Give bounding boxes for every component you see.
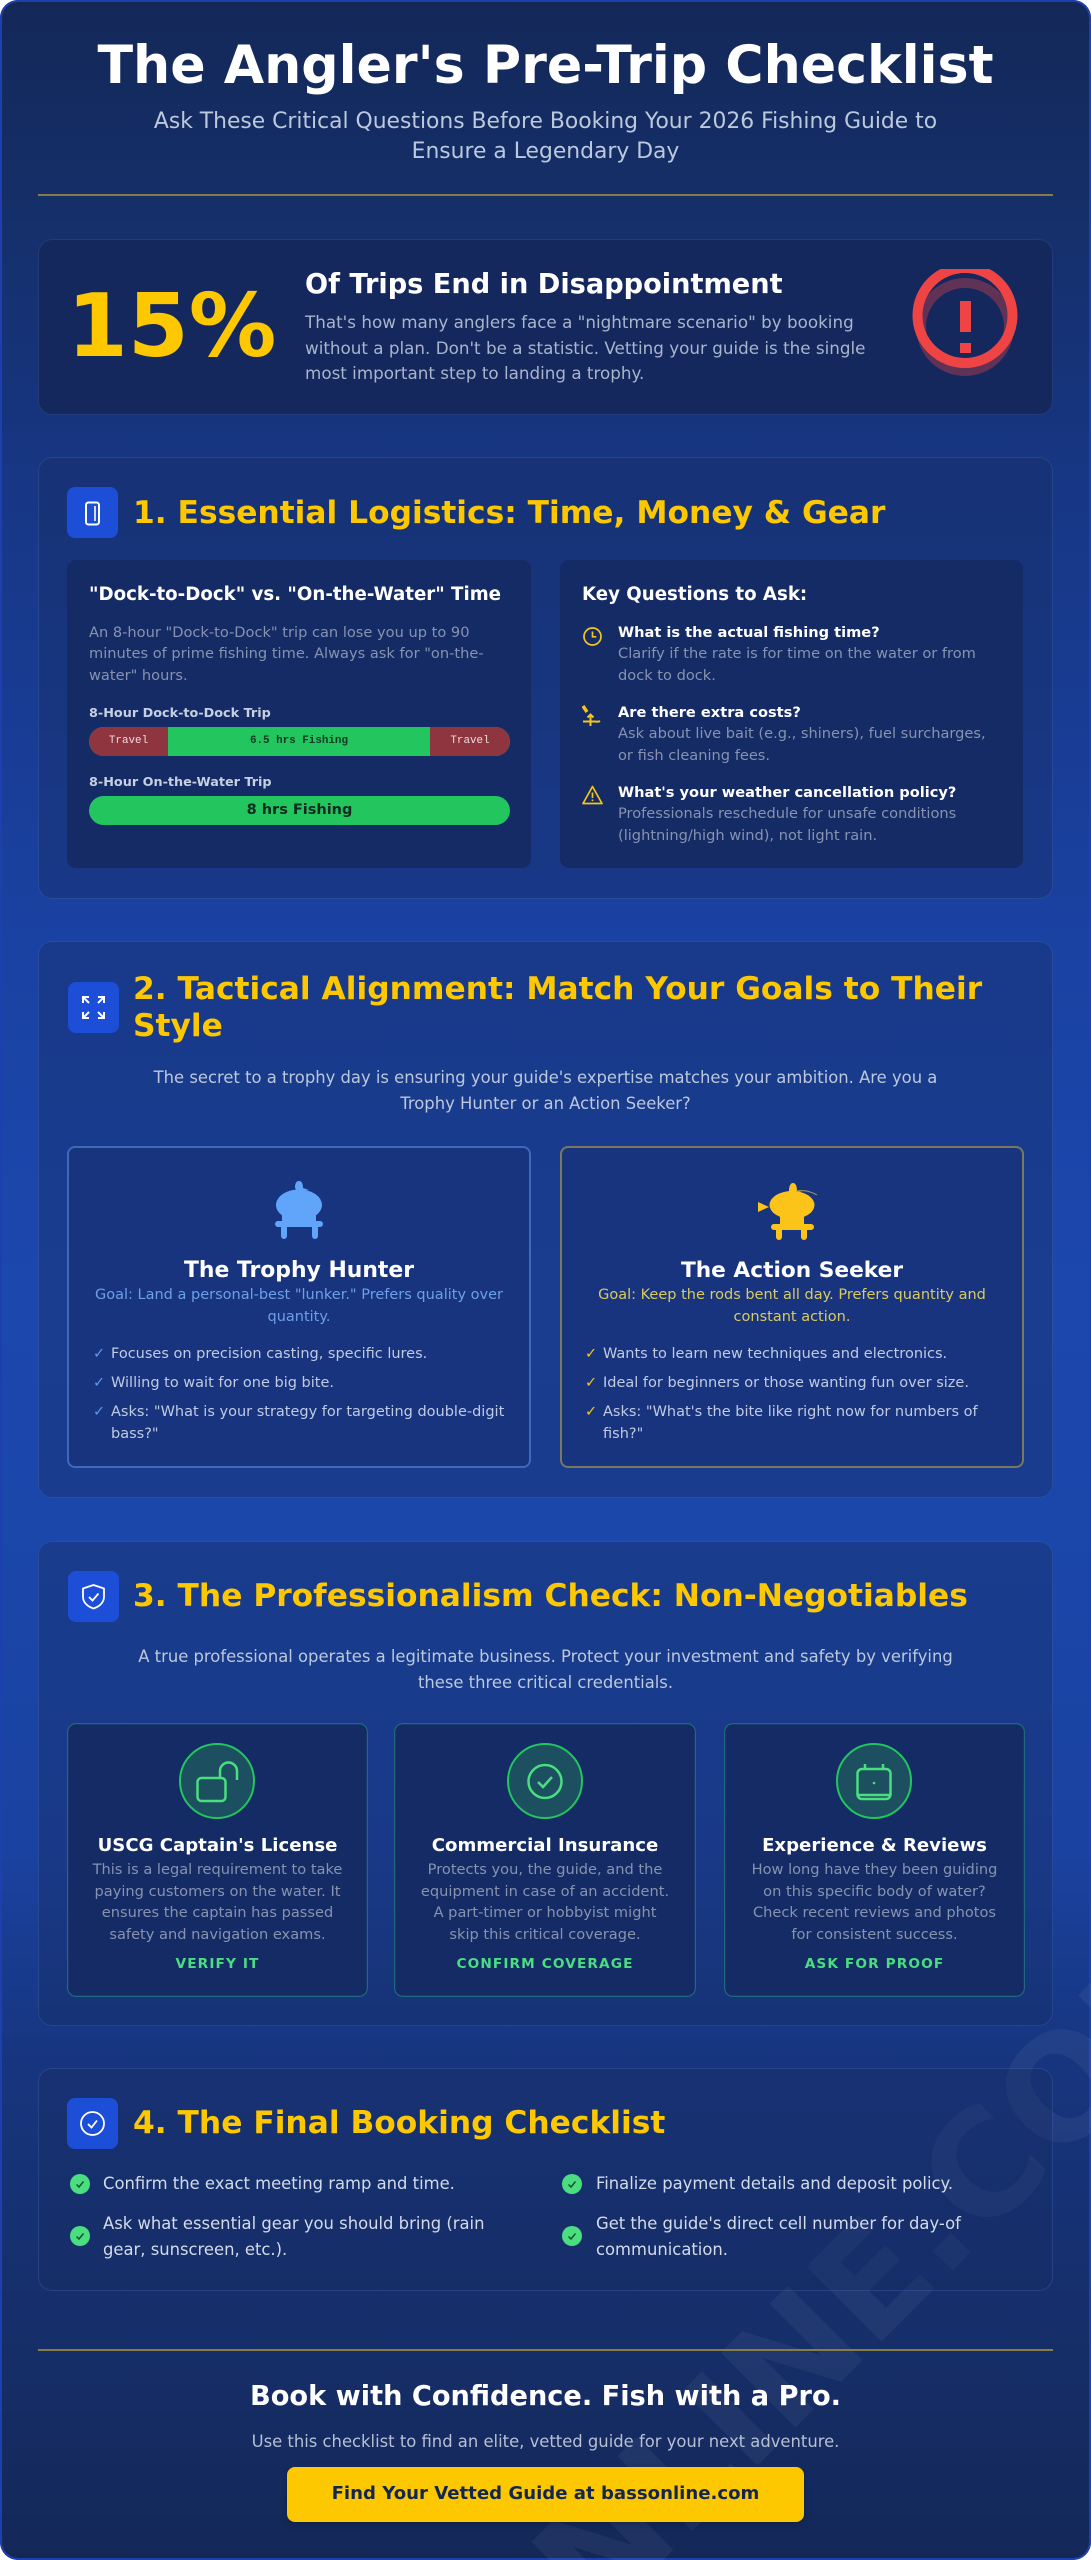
card: action seeker bbox=[560, 1146, 1024, 1468]
title: The Angler's Pre-Trip Checklist bbox=[97, 36, 994, 96]
card text: equipment in case of an accident. bbox=[421, 1883, 669, 1900]
icon: alert circle bbox=[912, 269, 1018, 376]
card text bbox=[421, 1861, 669, 1943]
checklist: ✓ bbox=[93, 1346, 105, 1362]
goal text bbox=[95, 1287, 503, 1325]
checklist bbox=[585, 1346, 978, 1442]
section heading: 3. The Professionalism Check: Non-Negotiables bbox=[133, 1578, 968, 1614]
bar: on-the-water bbox=[89, 796, 510, 825]
card text: safety and navigation exams. bbox=[109, 1926, 326, 1943]
card text bbox=[92, 1861, 342, 1943]
bar: dock-to-dock bbox=[89, 727, 510, 756]
icon: shield check bbox=[68, 1571, 119, 1622]
checklist bbox=[93, 1346, 504, 1442]
checklist: ✓ bbox=[585, 1404, 597, 1420]
checklist: ✓ bbox=[93, 1375, 105, 1391]
checklist item: Finalize payment details and deposit policy. bbox=[596, 2174, 953, 2193]
footer divider bbox=[38, 2349, 1053, 2351]
question 2: Are there extra costs? bbox=[618, 704, 801, 720]
checklist: Focuses on precision casting, specific lures. bbox=[111, 1346, 427, 1362]
goal text: quantity. bbox=[268, 1309, 330, 1325]
card text: Protects you, the guide, and the bbox=[428, 1861, 662, 1878]
checklist item: Confirm the exact meeting ramp and time. bbox=[103, 2174, 455, 2193]
icon: action fish bbox=[758, 1183, 818, 1240]
checklist: Willing to wait for one big bite. bbox=[111, 1375, 334, 1391]
stat description: That's how many anglers face a "nightmare scenario" by booking bbox=[305, 312, 854, 332]
checklist: Asks: "What's the bite like right now for numbers of bbox=[603, 1404, 978, 1420]
icon: warning triangle bbox=[582, 786, 603, 804]
bar: dock-to-dock: 6.5 hrs Fishing bbox=[250, 735, 348, 747]
checklist: Asks: "What is your strategy for targeting double-digit bbox=[111, 1404, 504, 1420]
question 1 bbox=[618, 624, 976, 684]
checklist: Wants to learn new techniques and electronics. bbox=[603, 1346, 947, 1362]
stat description: most important step to landing a trophy. bbox=[305, 363, 644, 383]
card title: "Dock-to-Dock" vs. "On-the-Water" Time bbox=[89, 584, 501, 605]
icon: clock bbox=[583, 627, 602, 646]
card: action seeker: fish?" bbox=[603, 1426, 643, 1442]
icon: trophy fish bbox=[275, 1181, 323, 1239]
checklist item: Get the guide's direct cell number for day-of bbox=[596, 2214, 961, 2233]
section heading: Style bbox=[133, 1008, 223, 1044]
card: dock-to-dock comparison bbox=[67, 560, 531, 868]
card title: Commercial Insurance bbox=[432, 1835, 658, 1856]
card: experience and reviews bbox=[724, 1723, 1025, 1997]
bar: on-the-water: 8 hrs Fishing bbox=[247, 802, 352, 818]
call to action: ASK FOR PROOF bbox=[805, 1956, 944, 1972]
icon: bait bbox=[582, 705, 600, 726]
bar label: 8-Hour On-the-Water Trip bbox=[89, 775, 272, 790]
icon: expand arrows bbox=[68, 982, 119, 1033]
card text: water" hours. bbox=[89, 667, 188, 684]
section heading: 2. Tactical Alignment: Match Your Goals to Their bbox=[133, 971, 982, 1007]
stat heading: Of Trips End in Disappointment bbox=[305, 269, 783, 300]
intro text: these three critical credentials. bbox=[418, 1673, 673, 1692]
footer heading: Book with Confidence. Fish with a Pro. bbox=[250, 2381, 841, 2412]
checklist: Ideal for beginners or those wanting fun over size. bbox=[603, 1375, 969, 1391]
question 2: Ask about live bait (e.g., shiners), fuel surcharges, bbox=[618, 725, 986, 742]
icon: check circle bbox=[507, 1743, 583, 1819]
card text: Check recent reviews and photos bbox=[753, 1904, 996, 1921]
footer text: Use this checklist to find an elite, vetted guide for your next adventure. bbox=[252, 2432, 839, 2451]
intro text bbox=[154, 1068, 937, 1113]
card: commercial insurance bbox=[394, 1723, 696, 1997]
intro text: Trophy Hunter or an Action Seeker? bbox=[400, 1094, 691, 1113]
bar: dock-to-dock: Travel bbox=[450, 735, 490, 747]
card: captain's license bbox=[67, 1723, 368, 1997]
goal text bbox=[598, 1287, 986, 1325]
card: trophy hunter bbox=[67, 1146, 531, 1468]
stat description: without a plan. Don't be a statistic. Vetting your guide is the single bbox=[305, 338, 865, 358]
checklist item bbox=[562, 2214, 962, 2259]
goal text: constant action. bbox=[734, 1309, 850, 1325]
question 3: Professionals reschedule for unsafe conditions bbox=[618, 805, 956, 822]
stat description bbox=[304, 312, 865, 383]
checklist: ✓ bbox=[585, 1346, 597, 1362]
question 3 bbox=[618, 784, 956, 844]
card title: Key Questions to Ask: bbox=[582, 584, 807, 605]
question 1: What is the actual fishing time? bbox=[618, 624, 880, 640]
section heading: 4. The Final Booking Checklist bbox=[133, 2105, 665, 2141]
subtitle: Ask These Critical Questions Before Booking Your 2026 Fishing Guide to bbox=[154, 109, 937, 134]
card title: USCG Captain's License bbox=[98, 1835, 337, 1856]
button: Find Your Vetted Guide at bassonline.com bbox=[332, 2483, 759, 2504]
checklist: ✓ bbox=[585, 1375, 597, 1391]
question 3: What's your weather cancellation policy? bbox=[618, 784, 956, 800]
bar: dock-to-dock: Travel bbox=[109, 735, 148, 747]
card text: for consistent success. bbox=[791, 1926, 958, 1943]
bar label: 8-Hour Dock-to-Dock Trip bbox=[89, 706, 271, 720]
icon: circle check bbox=[67, 2098, 118, 2149]
checklist item bbox=[70, 2214, 484, 2259]
card text: ensures the captain has passed bbox=[102, 1904, 333, 1921]
question 2 bbox=[618, 704, 986, 764]
intro text: A true professional operates a legitimate business. Protect your investment and safety by verifying bbox=[138, 1647, 953, 1666]
panel: 4. Final Booking Checklist bbox=[38, 2068, 1053, 2291]
button bbox=[287, 2467, 804, 2522]
checklist item: Ask what essential gear you should bring (rain bbox=[103, 2214, 484, 2233]
header divider bbox=[38, 194, 1053, 196]
card title: The Action Seeker bbox=[681, 1258, 903, 1283]
card text: paying customers on the water. It bbox=[95, 1883, 340, 1900]
card text: on this specific body of water? bbox=[763, 1883, 986, 1900]
subtitle: Ensure a Legendary Day bbox=[412, 138, 679, 164]
checklist item: communication. bbox=[596, 2240, 728, 2259]
card: trophy hunter: bass?" bbox=[111, 1426, 159, 1442]
question 1: Clarify if the rate is for time on the water or from bbox=[618, 645, 976, 662]
card text: minutes of prime fishing time. Always ask for "on-the- bbox=[89, 645, 484, 662]
card: key questions bbox=[560, 560, 1023, 868]
question 1: dock to dock. bbox=[618, 667, 716, 684]
goal text: Goal: Keep the rods bent all day. Prefers quantity and bbox=[598, 1287, 986, 1303]
big number: 15% bbox=[67, 275, 276, 377]
goal text: Goal: Land a personal-best "lunker." Prefers quality over bbox=[95, 1287, 503, 1303]
checklist: ✓ bbox=[93, 1404, 105, 1420]
card text: skip this critical coverage. bbox=[449, 1926, 641, 1943]
card text: An 8-hour "Dock-to-Dock" trip can lose you up to 90 bbox=[89, 624, 470, 640]
card text: A part-timer or hobbyist might bbox=[434, 1904, 656, 1921]
checklist item: gear, sunscreen, etc.). bbox=[103, 2240, 287, 2259]
intro text bbox=[138, 1647, 953, 1692]
call to action: CONFIRM COVERAGE bbox=[456, 1956, 634, 1972]
intro text: The secret to a trophy day is ensuring your guide's expertise matches your ambition. Are you a bbox=[154, 1068, 937, 1087]
subtitle bbox=[154, 109, 937, 164]
panel: 3. Professionalism Check bbox=[38, 1541, 1053, 2026]
call to action: VERIFY IT bbox=[176, 1956, 259, 1972]
card text: This is a legal requirement to take bbox=[93, 1861, 342, 1878]
icon: open lock bbox=[179, 1743, 255, 1819]
card text bbox=[89, 624, 484, 684]
icon: tablet bbox=[67, 487, 118, 538]
panel: 15% statistic bbox=[38, 239, 1053, 415]
card text: How long have they been guiding bbox=[752, 1861, 997, 1878]
card text bbox=[752, 1861, 997, 1943]
panel: 2. Tactical Alignment bbox=[38, 941, 1053, 1498]
question 3: (lightning/high wind), not light rain. bbox=[618, 827, 877, 844]
icon: calendar bbox=[836, 1743, 912, 1819]
panel: 1. Essential Logistics bbox=[38, 457, 1053, 899]
section heading: 1. Essential Logistics: Time, Money & Gear bbox=[133, 495, 885, 531]
section heading bbox=[133, 971, 982, 1044]
card title: Experience & Reviews bbox=[762, 1835, 987, 1856]
question 2: or fish cleaning fees. bbox=[618, 747, 770, 764]
card title: The Trophy Hunter bbox=[184, 1258, 414, 1283]
